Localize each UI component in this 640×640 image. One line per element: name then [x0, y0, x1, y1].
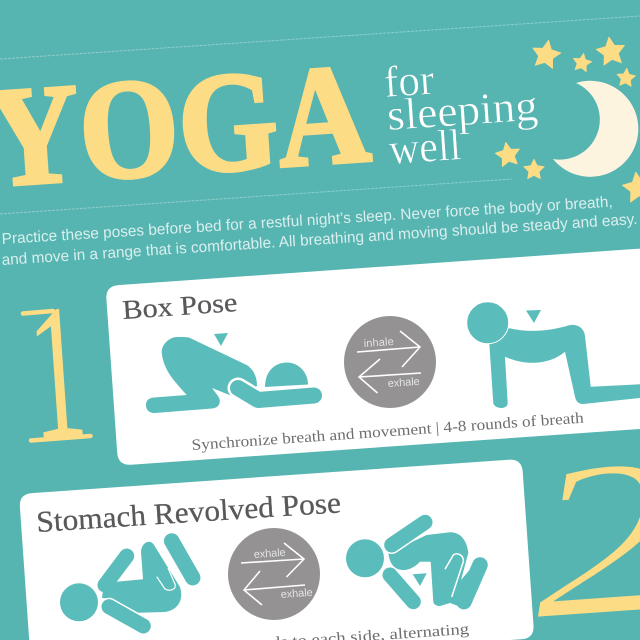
icon: exhale circle: [228, 528, 320, 620]
icon: box pose, folded figure: [146, 333, 314, 413]
subtitle: for sleeping well: well: [387, 120, 463, 174]
panel: Box Pose: [106, 249, 640, 465]
icon: revolved figure left: [60, 541, 193, 626]
icon: exhale circle: exhale: [253, 547, 286, 561]
panel: Stomach Revolved Pose: [20, 460, 534, 640]
intro text: and move in a range that is comfortable. All breathing and moving should be steady and easy.: [1, 211, 638, 269]
icon: inhale exhale circle: inhale: [363, 336, 394, 350]
subtitle: for sleeping well: [382, 55, 539, 174]
intro text: Practice these poses before bed for a restful night’s sleep. Never force the body or breath,: [1, 194, 613, 248]
heading: Stomach Revolved Pose: Stomach Revolved Pose: [35, 486, 342, 539]
heading: Box Pose: Box Pose: [121, 287, 238, 325]
icon: inhale exhale circle: exhale: [387, 376, 420, 390]
icon: revolved figure right: [346, 522, 486, 606]
icon: exhale circle: exhale: [280, 587, 313, 601]
icon: box pose, tabletop figure: [467, 302, 640, 408]
subtitle: for sleeping well: sleeping: [385, 81, 539, 140]
icon: crescent moon: [553, 81, 638, 177]
subtitle: for sleeping well: for: [382, 55, 436, 107]
icon: stars: [494, 35, 640, 203]
numeral 1: 1: [22, 263, 92, 480]
caption: box pose: Synchronize breath and movement | 4-8 rounds of breath: [191, 410, 585, 454]
icon: inhale exhale circle: [344, 316, 436, 408]
